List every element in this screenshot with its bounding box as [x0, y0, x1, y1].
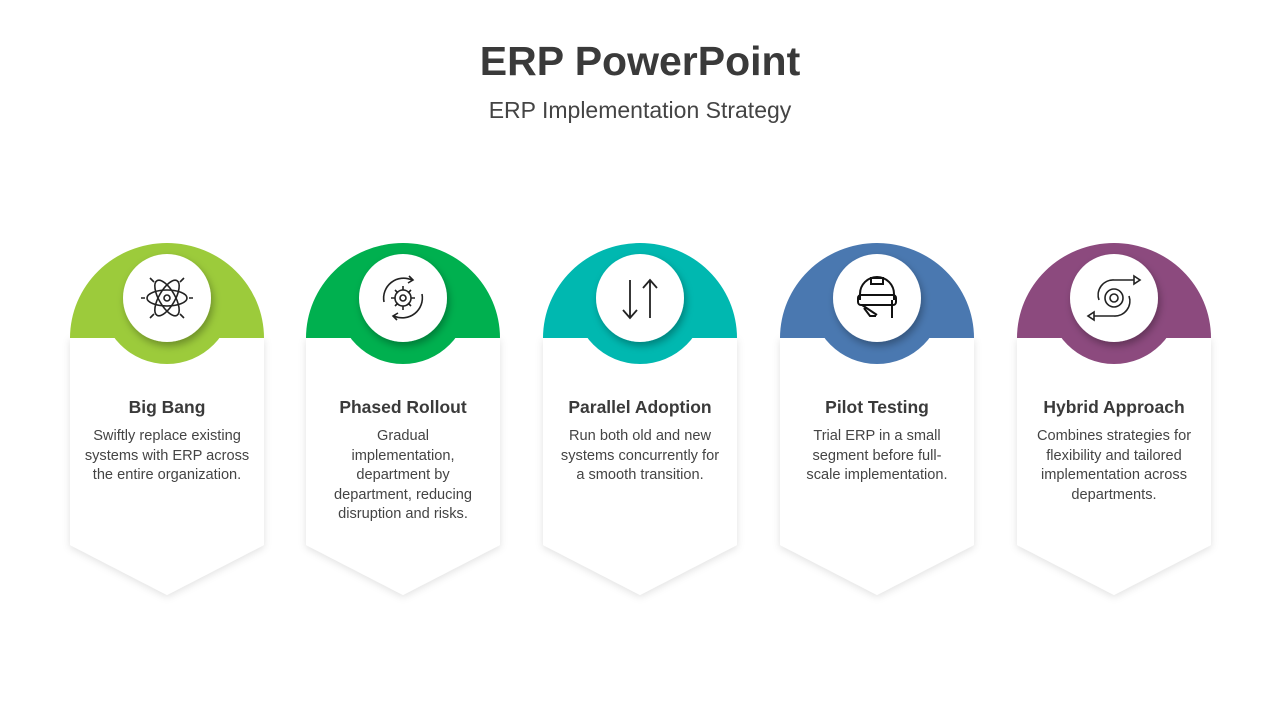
text block: departments. [1071, 486, 1157, 502]
text block: implementation, [351, 448, 455, 464]
panel: Pilot Testing [778, 243, 976, 598]
heading: Parallel Adoption [568, 397, 712, 417]
text block: Trial ERP in a small [813, 428, 941, 444]
text block: segment before full- [812, 448, 941, 464]
text block: Run both old and new [569, 428, 711, 444]
text block: disruption and risks. [338, 506, 468, 522]
icon: up-down arrows [623, 280, 657, 318]
text block: systems concurrently for [561, 448, 719, 464]
panel: Big Bang [68, 243, 266, 598]
text block [334, 428, 472, 522]
panel: Phased Rollout [304, 243, 502, 598]
text block: department by [356, 467, 450, 483]
heading: Hybrid Approach [1043, 397, 1185, 417]
text block: Swiftly replace existing [93, 428, 241, 444]
panel: Hybrid Approach [1014, 243, 1214, 598]
text block: systems with ERP across [85, 448, 249, 464]
text block: flexibility and tailored [1046, 448, 1182, 464]
text block: Gradual [377, 428, 429, 444]
icon: gear cycle [384, 276, 422, 320]
text block: the entire organization. [93, 467, 241, 483]
heading: Pilot Testing [825, 397, 929, 417]
text block: implementation across [1041, 467, 1187, 483]
text block [806, 428, 948, 483]
text block [561, 428, 719, 483]
text block: scale implementation. [806, 467, 948, 483]
title: ERP PowerPoint [480, 38, 800, 84]
icon: pilot helmet [858, 277, 896, 318]
text block [85, 428, 249, 483]
text block: department, reducing [334, 486, 472, 502]
panel: Parallel Adoption [540, 243, 740, 598]
text block: a smooth transition. [576, 467, 704, 483]
icon: gear with arrows [1088, 276, 1140, 320]
icon: atom [141, 277, 193, 319]
text block [1037, 428, 1191, 502]
heading: Big Bang [129, 397, 205, 417]
subtitle: ERP Implementation Strategy [489, 97, 791, 123]
text block: Combines strategies for [1037, 428, 1191, 444]
heading: Phased Rollout [339, 397, 467, 417]
